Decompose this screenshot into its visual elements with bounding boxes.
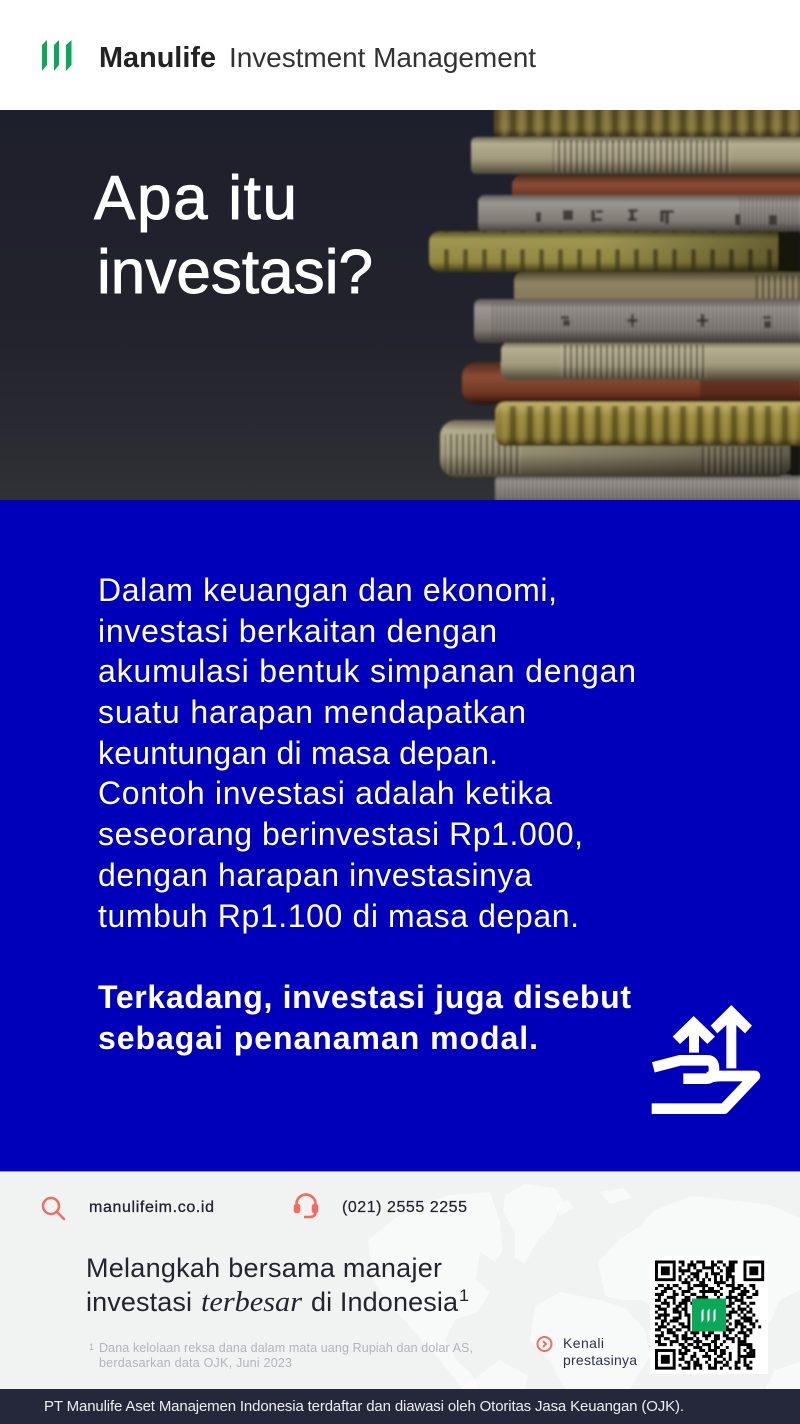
link: kenali prestasinya: prestasinya bbox=[563, 1352, 637, 1368]
footnote: Dana kelolaan reksa dana dalam mata uang Rupiah dan dolar AS, bbox=[99, 1341, 473, 1355]
body text: Dalam keuangan dan ekonomi, bbox=[98, 572, 557, 608]
tagline: investasi bbox=[86, 1287, 192, 1317]
icon: search bbox=[43, 1198, 64, 1219]
header: logo band bbox=[0, 0, 800, 109]
body text: dengan harapan investasinya bbox=[98, 857, 532, 893]
icon: Manulife green bars logo bbox=[42, 40, 72, 71]
tagline bbox=[86, 1253, 469, 1318]
tagline: Melangkah bersama manajer bbox=[86, 1253, 442, 1283]
title bbox=[94, 174, 372, 294]
logo wordmark: Investment Management bbox=[229, 42, 536, 73]
title: investasi? bbox=[97, 238, 373, 307]
icon: headset bbox=[295, 1195, 317, 1217]
world map background bbox=[462, 1202, 562, 1389]
body text: suatu harapan mendapatkan bbox=[98, 694, 526, 730]
body text: keuntungan di masa depan. bbox=[98, 735, 498, 771]
disclaimer bar bbox=[0, 1389, 800, 1424]
footnote: 1 bbox=[89, 1342, 94, 1352]
panel: blue definition bbox=[0, 500, 800, 1172]
body text: tumbuh Rp1.100 di masa depan. bbox=[98, 898, 579, 934]
body text: seseorang berinvestasi Rp1.000, bbox=[98, 816, 583, 852]
body text: Contoh investasi adalah ketika bbox=[98, 775, 552, 811]
website link: manulifeim.co.id bbox=[89, 1199, 214, 1216]
disclaimer bar: PT Manulife Aset Manajemen Indonesia terdaftar dan diawasi oleh Otoritas Jasa Keuangan (OJK). bbox=[44, 1398, 684, 1415]
tagline: 1 bbox=[459, 1286, 469, 1305]
bold note bbox=[98, 979, 631, 1056]
tagline: terbesar bbox=[201, 1286, 303, 1318]
bold note: Terkadang, investasi juga disebut bbox=[98, 979, 631, 1015]
coin edge lettering marks bbox=[536, 209, 777, 225]
link: kenali prestasinya bbox=[563, 1335, 637, 1368]
tagline: di Indonesia bbox=[311, 1287, 459, 1317]
QR code bbox=[650, 1256, 768, 1374]
logo wordmark bbox=[99, 42, 536, 74]
illustration: stacked coins bbox=[429, 104, 800, 507]
QR centre logo bbox=[692, 1298, 726, 1332]
body text: investasi berkaitan dengan bbox=[98, 613, 497, 649]
body text bbox=[98, 572, 636, 934]
panel: contact footer bbox=[0, 1171, 800, 1389]
body text: akumulasi bentuk simpanan dengan bbox=[98, 653, 636, 689]
icon: hand with rising arrows bbox=[652, 1005, 755, 1109]
title: Apa itu bbox=[94, 164, 297, 233]
logo wordmark: Manulife bbox=[99, 42, 216, 74]
icon: chevron circle bbox=[538, 1337, 552, 1351]
footnote bbox=[89, 1341, 473, 1370]
footnote: berdasarkan data OJK, Juni 2023 bbox=[99, 1356, 292, 1370]
bold note: sebagai penanaman modal. bbox=[98, 1020, 538, 1056]
coin edge mint marks bbox=[561, 314, 771, 328]
link: kenali prestasinya: Kenali bbox=[563, 1335, 604, 1351]
hero panel: coin stack photo bbox=[0, 104, 800, 507]
phone number: (021) 2555 2255 bbox=[342, 1199, 467, 1216]
